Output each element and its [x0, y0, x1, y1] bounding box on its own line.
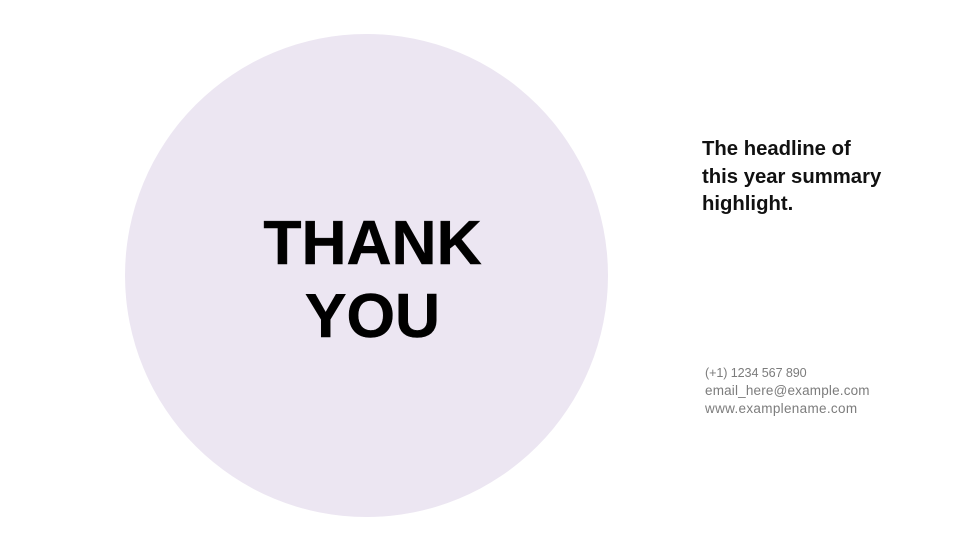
headline text: The headline of: [702, 138, 851, 160]
contact details: [705, 366, 870, 416]
panel: circle background: [125, 34, 608, 517]
contact details: (+1) 1234 567 890: [705, 366, 807, 380]
headline text: highlight.: [702, 193, 793, 215]
contact details: email_here@example.com: [705, 383, 870, 398]
title: thank you: [263, 209, 482, 351]
contact details: www.examplename.com: [705, 400, 857, 416]
headline text: [702, 138, 882, 215]
headline text: this year summary: [702, 166, 881, 188]
title: thank you: THANK: [263, 209, 482, 278]
title: thank you: YOU: [305, 282, 440, 351]
